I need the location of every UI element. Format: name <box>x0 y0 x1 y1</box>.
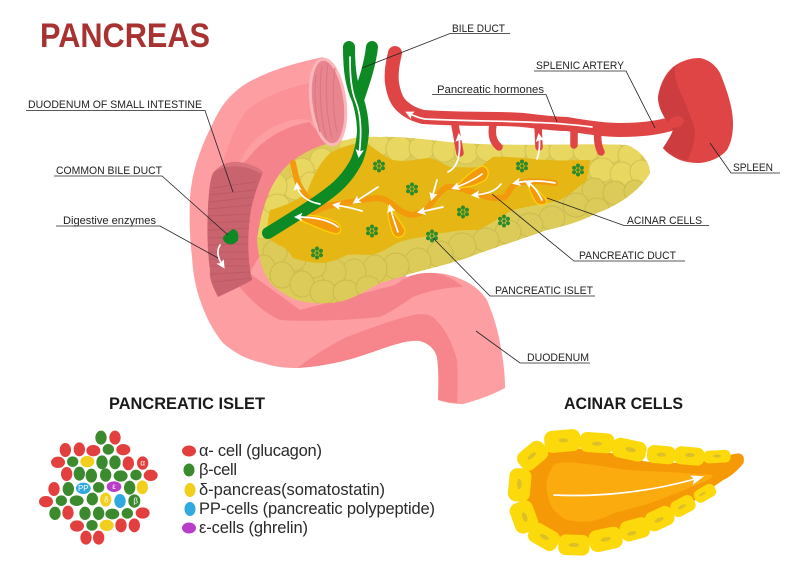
legend <box>182 442 435 537</box>
label: pancreatic duct: PANCREATIC DUCT <box>579 250 676 262</box>
label: duodenum: DUODENUM <box>527 352 589 364</box>
label: pancreatic duct <box>492 194 685 262</box>
duodenum <box>190 57 505 404</box>
legend: α- cell (glucagon) <box>199 442 322 460</box>
heading: pancreatic islet: PANCREATIC ISLET <box>109 394 266 413</box>
splenic artery <box>392 53 677 153</box>
common bile duct opening <box>223 229 238 244</box>
lower dark band <box>297 314 458 403</box>
islet cell cluster: δ <box>104 495 109 504</box>
label: spleen <box>710 143 780 174</box>
label: splenic artery <box>534 60 655 128</box>
title: PANCREAS <box>40 17 210 55</box>
label: duodenum <box>476 331 590 364</box>
legend: δ-pancreas(somatostatin) <box>199 481 385 499</box>
label: acinar cells <box>547 198 709 227</box>
label: duodenum of small intestine: DUODENUM OF SMALL INTESTINE <box>28 99 202 111</box>
bile duct <box>268 47 372 233</box>
pancreas gold tissue <box>267 143 590 263</box>
islet cell cluster: β <box>133 497 138 506</box>
duct drops <box>297 215 341 234</box>
heading: acinar cells: ACINAR CELLS <box>564 394 683 413</box>
label: pancreatic hormones: Pancreatic hormones <box>437 84 545 96</box>
legend: PP-cells (pancreatic polypeptide) <box>199 500 435 518</box>
label: digestive enzymes <box>56 215 218 258</box>
label: acinar cells: ACINAR CELLS <box>627 215 702 227</box>
islet cell cluster: ε <box>112 482 116 491</box>
islet cell cluster <box>39 431 158 545</box>
label: common bile duct <box>54 165 228 235</box>
legend: ε-cells (ghrelin) <box>199 519 308 537</box>
acinar cell diagram <box>507 428 744 556</box>
flow arrows <box>218 113 592 266</box>
label: pancreatic islet <box>433 238 595 297</box>
label: pancreatic islet: PANCREATIC ISLET <box>495 285 593 297</box>
spleen <box>658 58 733 163</box>
islets in pancreas <box>311 160 584 260</box>
label: common bile duct: COMMON BILE DUCT <box>56 165 162 177</box>
muscle layer <box>207 162 263 297</box>
label: spleen: SPLEEN <box>733 162 773 174</box>
pancreatic duct <box>293 163 555 237</box>
duodenum opening <box>306 57 350 147</box>
islet cell cluster: α <box>140 459 145 468</box>
label: bile duct: BILE DUCT <box>452 23 505 35</box>
outer band <box>208 122 330 280</box>
label: digestive enzymes: Digestive enzymes <box>63 215 156 227</box>
pancreas lobules <box>257 136 650 304</box>
islet cell cluster: PP <box>78 484 89 493</box>
label: splenic artery: SPLENIC ARTERY <box>536 60 625 72</box>
legend: β-cell <box>199 461 237 479</box>
label: duodenum of small intestine <box>26 99 233 192</box>
label: bile duct <box>362 23 510 68</box>
label: pancreatic hormones <box>432 84 557 122</box>
